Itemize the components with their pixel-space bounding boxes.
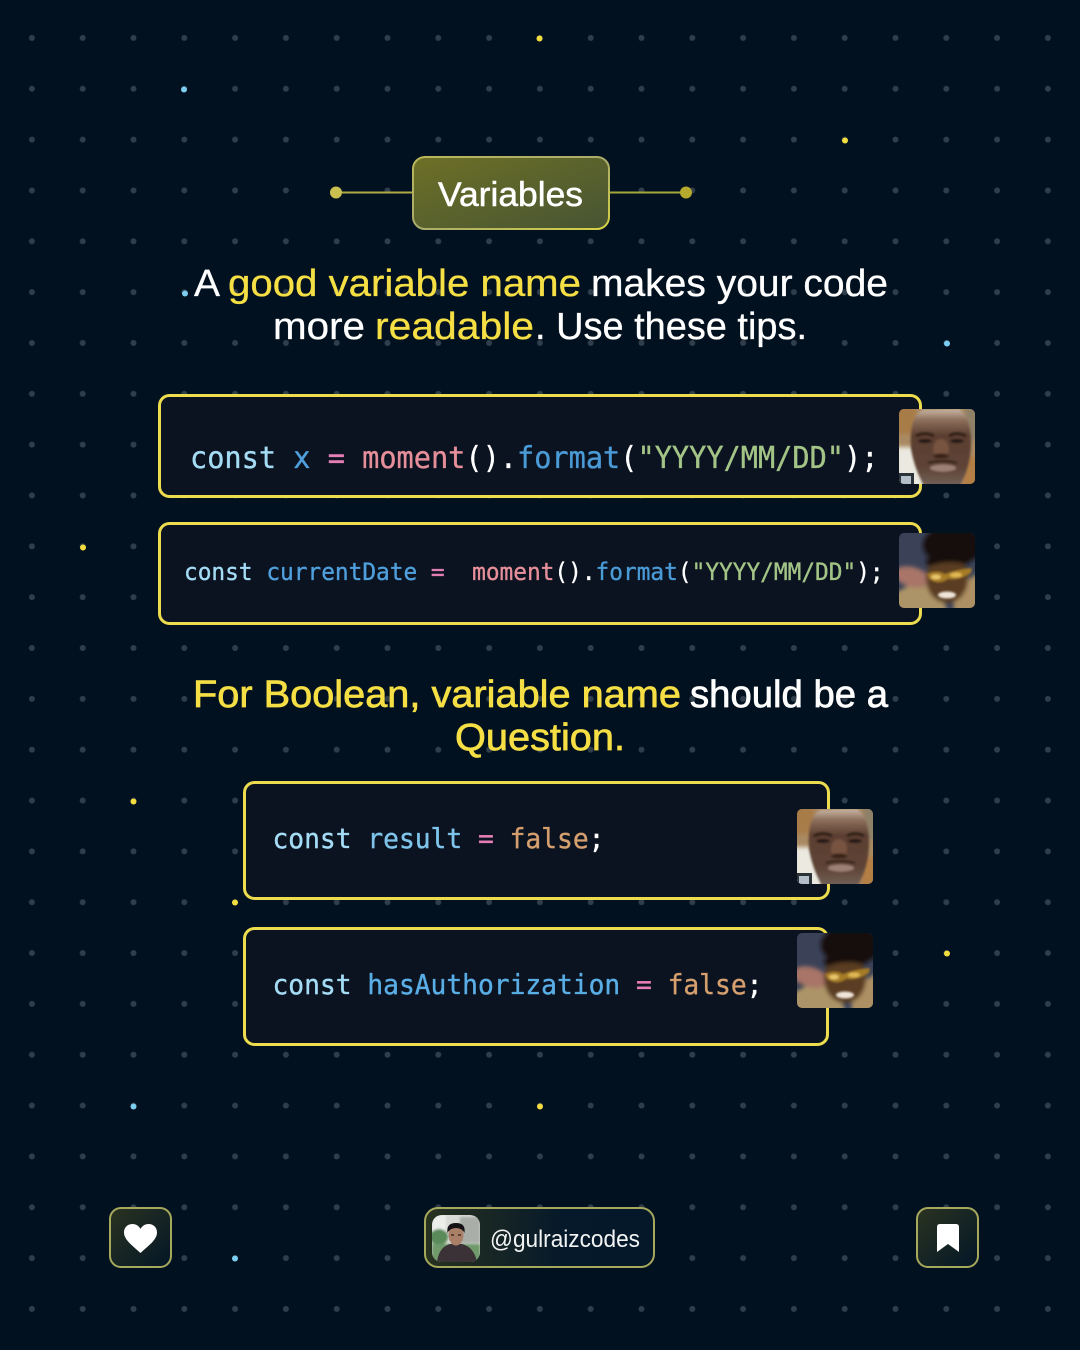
icon: disapproving face 1 [896, 406, 979, 489]
handle: @gulraizcodes [490, 1226, 640, 1253]
title badge with connectors [330, 157, 692, 229]
code panel: bad boolean [244, 782, 828, 898]
code line: const x = moment().format("YYYY/MM/DD"); [190, 440, 878, 475]
icon: heart [124, 1224, 157, 1253]
code panel: bad date variable [160, 396, 920, 496]
icon: happy face 1 [892, 525, 983, 613]
badge [413, 157, 609, 229]
boolean heading: Question. [455, 717, 625, 759]
boolean heading: For Boolean, variable name [193, 674, 681, 716]
intro heading: . Use these tips. [535, 306, 807, 348]
author handle pill [425, 1208, 654, 1267]
icon: bookmark [937, 1224, 959, 1252]
intro heading: A [194, 263, 221, 305]
connector: right [608, 186, 692, 198]
code panel: good date variable [160, 524, 920, 624]
icon: disapproving face 2 [794, 806, 877, 889]
icon: happy face 2 [790, 925, 881, 1013]
boolean heading [193, 674, 889, 759]
intro heading: makes your code [591, 263, 888, 305]
intro heading [194, 263, 888, 348]
intro heading: readable [375, 306, 534, 348]
intro heading: good variable name [228, 263, 581, 305]
code panel: good boolean [244, 928, 828, 1044]
code line: const currentDate = moment().format("YYYY/MM/DD"); [184, 557, 884, 586]
badge title: Variables [438, 176, 583, 214]
code line: const result = false; [272, 823, 604, 855]
avatar [430, 1215, 480, 1264]
save button [917, 1208, 978, 1267]
intro heading: more [273, 306, 365, 348]
accent dots [80, 36, 950, 1262]
connector: left [330, 186, 414, 198]
like button [110, 1208, 171, 1267]
boolean heading: should be a [690, 674, 889, 716]
code line: const hasAuthorization = false; [272, 969, 762, 1001]
